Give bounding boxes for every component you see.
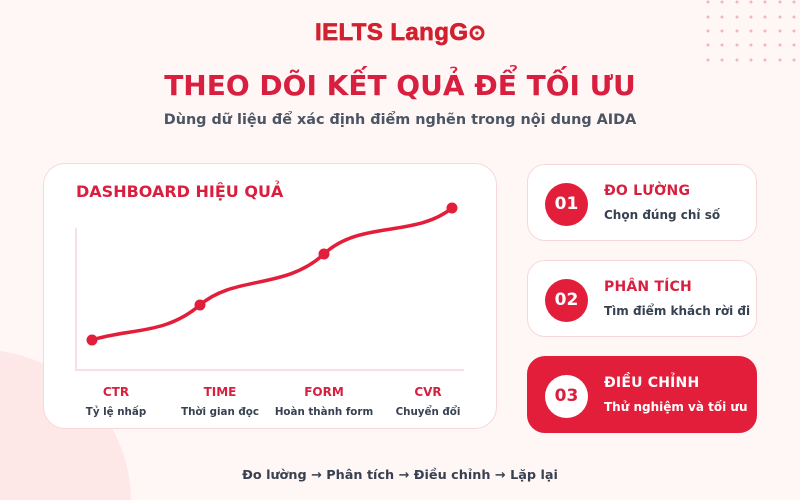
step 01 heading: ĐO LƯỜNG (604, 183, 690, 199)
dot pattern (706, 0, 796, 62)
step 01 (527, 164, 757, 241)
step 02 number: 02 (555, 290, 578, 310)
dashboard heading: DASHBOARD HIỆU QUẢ (76, 182, 283, 201)
step 01 text: Chọn đúng chỉ số (604, 208, 720, 222)
panel background (43, 163, 497, 429)
metric: TIME (181, 385, 259, 418)
metric: CVR: CVR (414, 385, 442, 399)
metric: CTR: Tỷ lệ nhấp (86, 406, 146, 418)
metric: CVR: Chuyển đổi (396, 406, 460, 418)
metric: TIME: Thời gian đọc (181, 406, 259, 418)
title: THEO DÕI KẾT QUẢ ĐỂ TỐI ƯU (164, 69, 636, 102)
step 03 number (545, 375, 588, 418)
line chart (75, 202, 464, 371)
step 01 number: 01 (555, 194, 578, 214)
metric: TIME: TIME (204, 385, 236, 399)
metric: CTR (86, 385, 146, 418)
metric: FORM (275, 385, 373, 418)
metric: CVR (396, 385, 460, 418)
subtitle: Dùng dữ liệu để xác định điểm nghẽn trong nội dung AIDA (164, 112, 636, 128)
step 03 text: Thử nghiệm và tối ưu (604, 400, 748, 414)
logo: IELTS LangG (315, 19, 468, 46)
footer process line: Đo lường → Phân tích → Điều chỉnh → Lặp lại (242, 468, 558, 483)
background blob (0, 351, 131, 500)
step 03 heading: ĐIỀU CHỈNH (604, 375, 699, 391)
step 01 card (527, 164, 757, 241)
step 03 (527, 356, 757, 433)
step 02 card (527, 260, 757, 337)
metric: FORM: FORM (304, 385, 344, 399)
step 03 number: 03 (555, 386, 578, 406)
panel: dashboard (43, 163, 497, 429)
metric: CTR: CTR (103, 385, 129, 399)
step 03 card (527, 356, 757, 433)
step 02 heading: PHÂN TÍCH (604, 279, 692, 295)
step 02 text: Tìm điểm khách rời đi (604, 304, 750, 318)
step 01 number (545, 183, 588, 226)
metric: FORM: Hoàn thành form (275, 406, 373, 418)
step 02 number (545, 279, 588, 322)
step 02 (527, 260, 757, 337)
